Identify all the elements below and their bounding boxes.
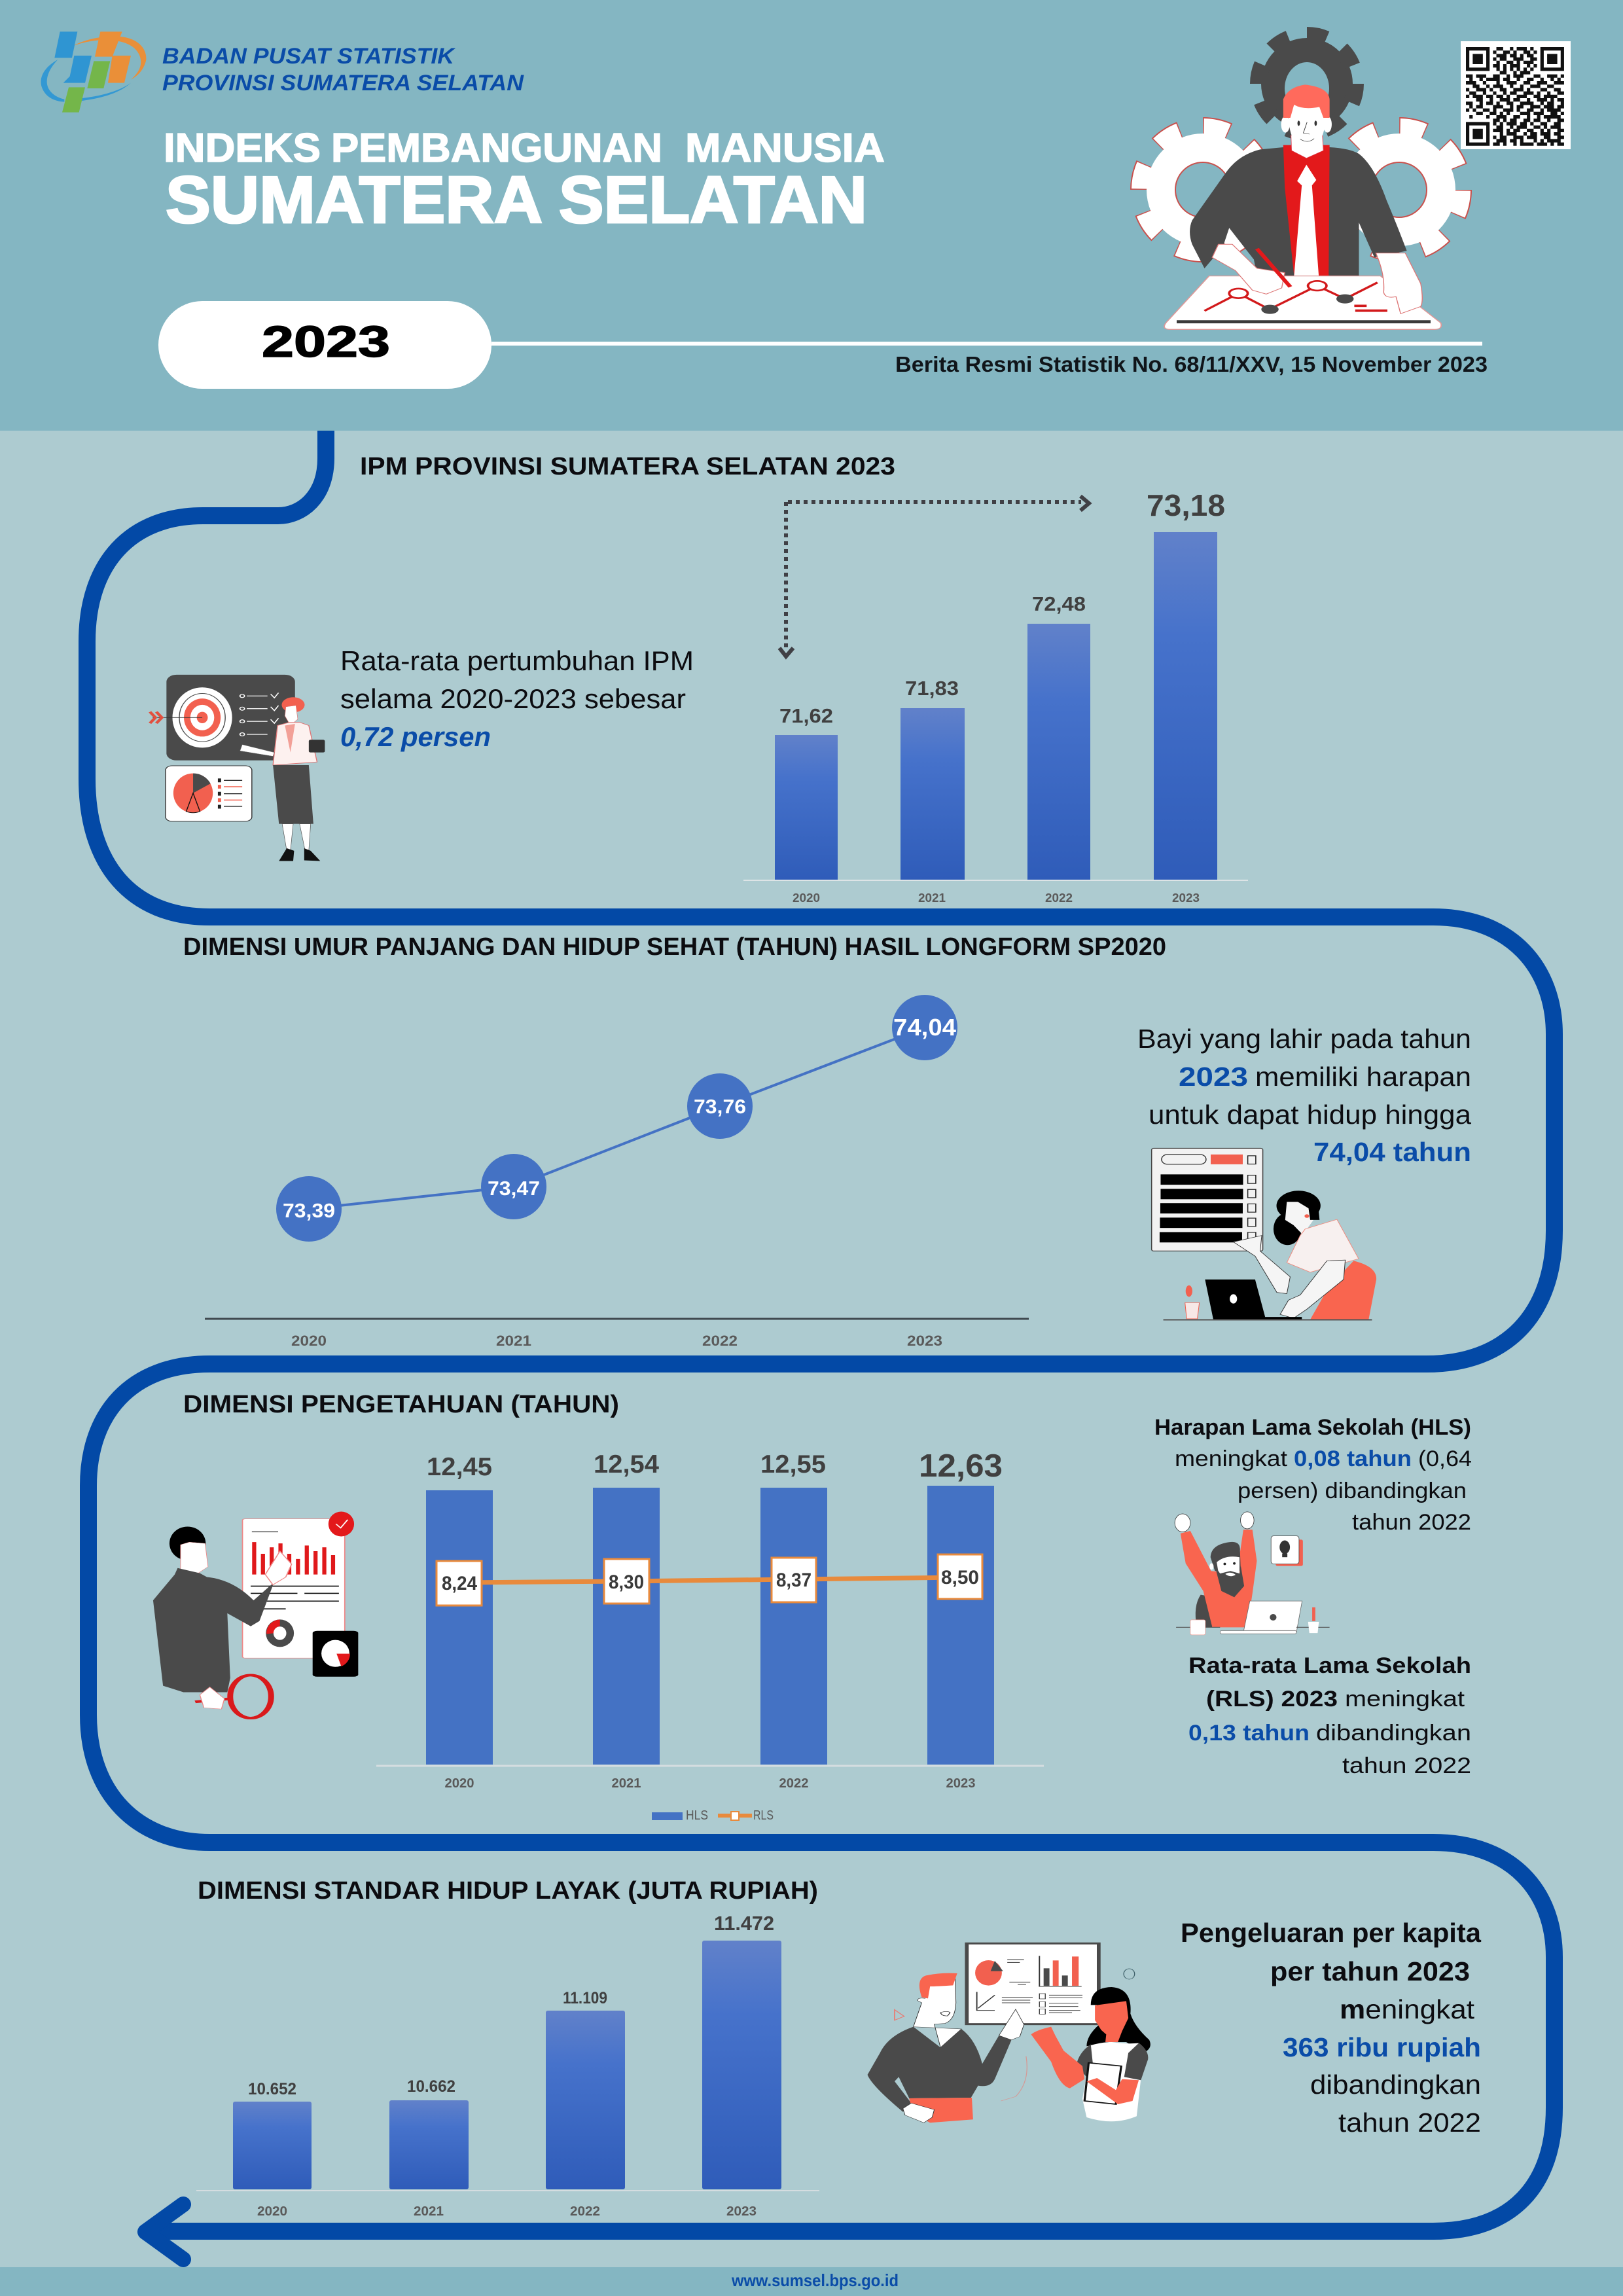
footer: www.sumsel.bps.go.id [731,2270,899,2290]
combo chart: HLS and RLS: 2021 [611,1776,641,1791]
text block: IPM growth: 0,72 persen [340,721,491,752]
heading: IPM: IPM PROVINSI SUMATERA SELATAN 2023 [360,453,895,480]
text block: expenditure: per tahun 2023 [1270,1956,1470,1986]
combo chart: HLS and RLS: 8,37 [776,1570,812,1591]
combo chart: HLS and RLS: 12,45 [427,1453,492,1481]
bar chart: expenditure per capita: 2020 [257,2204,287,2219]
combo chart: HLS and RLS: 8,50 [941,1567,979,1588]
panel: standard of living [196,1877,1482,2219]
bar chart: expenditure per capita [196,1912,819,2219]
combo chart: HLS and RLS [376,1448,1044,1823]
chart legend: HLS [686,1808,708,1823]
text block: HLS: Harapan Lama Sekolah (HLS) [1154,1415,1471,1440]
icon: BPS logo [41,31,146,113]
icon: dark gear [1258,35,1355,132]
text block: expenditure [1181,1918,1482,2138]
line chart: life expectancy: 2020 [291,1333,327,1349]
text block: expenditure: tahun 2022 [1338,2108,1481,2138]
illustration: woman with checklist [1152,1148,1376,1319]
header panel [0,0,1623,431]
line chart: life expectancy: 2023 [907,1333,942,1349]
bar chart: IPM 2020-2023: 71,62 [779,704,833,727]
text block: IPM growth: selama 2020-2023 sebesar [340,683,686,714]
icon: white gear right [1336,127,1462,253]
combo chart: HLS and RLS: 2020 [445,1776,474,1791]
illustration: two people at board [868,1943,1150,2123]
bar chart: IPM 2020-2023: 2023 [1172,891,1200,905]
bar chart: IPM 2020-2023 [743,488,1248,905]
bar chart: IPM 2020-2023: 71,83 [905,677,959,700]
line chart: life expectancy [205,995,1029,1349]
text block: IPM growth [340,645,694,752]
line chart: life expectancy: 73,39 [283,1199,335,1222]
text block: HLS: persen) dibandingkan [1238,1479,1467,1503]
combo chart: HLS and RLS: 12,63 [919,1448,1003,1484]
title: PEMBANGUNAN [331,126,662,171]
bar chart: IPM 2020-2023: 72,48 [1032,592,1086,615]
title: INDEKS [164,126,321,171]
text block: HLS: 0,08 tahun [1294,1446,1412,1471]
text block: life expectancy: 74,04 tahun [1313,1137,1471,1167]
combo chart: HLS and RLS: 12,55 [760,1450,826,1479]
chart legend [652,1808,774,1823]
line chart: life expectancy: 73,76 [694,1095,746,1118]
bar chart: expenditure per capita: 10.662 [407,2077,455,2096]
combo chart: HLS and RLS: 2022 [779,1776,809,1791]
bar chart: expenditure per capita: 10.652 [248,2080,296,2098]
text block: HLS: tahun 2022 [1352,1510,1471,1535]
bar chart: IPM 2020-2023: 2021 [918,891,946,905]
heading: standard of living: DIMENSI STANDAR HIDUP LAYAK (JUTA RUPIAH) [198,1877,818,1905]
title: SUMATERA SELATAN [166,164,867,237]
text block: life expectancy [1137,1024,1471,1167]
text block: RLS: meningkat [1345,1687,1465,1712]
heading: education: DIMENSI PENGETAHUAN (TAHUN) [183,1391,619,1418]
text block: RLS: (RLS) 2023 [1206,1687,1338,1712]
QR code [1461,41,1571,149]
panel: education [153,1391,1472,1823]
illustration: man at desk [1164,84,1441,329]
text block: IPM growth: Rata-rata pertumbuhan IPM [340,645,694,676]
organisation name [162,44,525,96]
bar chart: expenditure per capita: 11.472 [714,1912,774,1935]
year pill: 2023 [262,317,390,367]
combo chart: HLS and RLS: 8,24 [442,1573,477,1594]
text block: HLS: (0,64 [1418,1446,1472,1471]
illustration: cheering man [1175,1512,1330,1635]
text block: expenditure: Pengeluaran per kapita [1181,1918,1482,1948]
bar chart: expenditure per capita: 2022 [570,2204,600,2219]
flow ribbon with arrow [87,431,1554,2259]
panel: IPM [150,453,1248,905]
text block: life expectancy: 2023 [1179,1062,1248,1092]
bar chart: IPM 2020-2023: 2020 [793,891,820,905]
title [164,126,885,237]
line chart: life expectancy: 2022 [702,1333,738,1349]
title: MANUSIA [685,126,885,171]
year pill [158,301,491,389]
organisation name: PROVINSI SUMATERA SELATAN [162,71,525,96]
text block: RLS: tahun 2022 [1342,1753,1471,1778]
chart legend: RLS [753,1808,774,1823]
text block: RLS [1188,1653,1471,1778]
text block: life expectancy: Bayi yang lahir pada tahun [1137,1024,1471,1054]
text block: life expectancy: memiliki harapan [1255,1062,1471,1092]
line chart: life expectancy: 73,47 [488,1177,540,1200]
illustration: man with report [153,1512,358,1718]
text block: HLS: meningkat [1175,1446,1288,1471]
heading: life expectancy: DIMENSI UMUR PANJANG DAN HIDUP SEHAT (TAHUN) HASIL LONGFORM SP2020 [183,933,1166,961]
footer [0,2267,1623,2296]
bar chart: expenditure per capita: 2021 [414,2204,444,2219]
combo chart: HLS and RLS: 8,30 [609,1571,644,1593]
illustration: woman with target [150,675,325,861]
bar chart: IPM 2020-2023: 2022 [1045,891,1073,905]
panel: life expectancy [183,933,1471,1349]
text block: RLS: dibandingkan [1316,1721,1471,1746]
text block: expenditure: 363 ribu rupiah [1283,2032,1481,2062]
publication reference: Berita Resmi Statistik No. 68/11/XXV, 15 November 2023 [895,352,1488,376]
organisation name: BADAN PUSAT STATISTIK [162,44,456,69]
text block: expenditure: dibandingkan [1310,2070,1481,2100]
line chart: life expectancy: 74,04 [893,1014,956,1041]
combo chart: HLS and RLS: 12,54 [594,1450,659,1479]
bar chart: expenditure per capita: 2023 [726,2204,757,2219]
bar chart: IPM 2020-2023: 73,18 [1147,488,1225,522]
text block: expenditure: meningkat [1340,1994,1475,2024]
text block: RLS: Rata-rata Lama Sekolah [1188,1653,1471,1678]
icon: white gear left [1140,127,1266,253]
text block: life expectancy: untuk dapat hidup hingga [1149,1100,1471,1130]
combo chart: HLS and RLS: 2023 [946,1776,975,1791]
text block: RLS: 0,13 tahun [1188,1721,1310,1746]
line chart: life expectancy: 2021 [496,1333,531,1349]
bar chart: expenditure per capita: 11.109 [563,1989,607,2007]
text block: HLS [1154,1415,1472,1535]
dotted bracket arrow [779,496,1089,656]
